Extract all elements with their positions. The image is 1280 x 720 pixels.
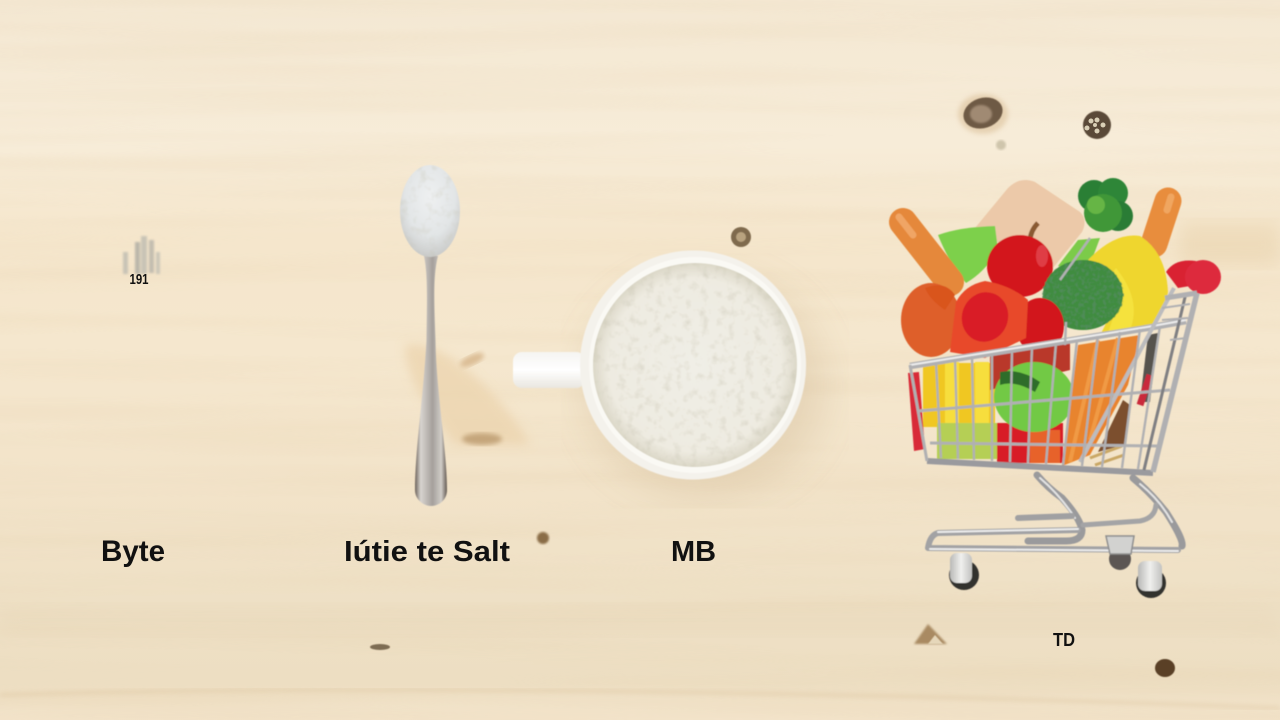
red apple xyxy=(987,223,1053,297)
bread xyxy=(975,180,1085,268)
orange tomato xyxy=(901,283,961,357)
spoon bowl with salt xyxy=(400,165,460,257)
spoon of salt xyxy=(400,165,460,506)
left carrot xyxy=(903,222,950,282)
yellow banana xyxy=(1088,236,1168,335)
label: cart caption: TD xyxy=(1053,630,1075,650)
red handle cap xyxy=(1166,260,1221,294)
front right wheel xyxy=(1136,561,1166,598)
basket contents xyxy=(923,333,1158,466)
red pepper xyxy=(950,281,1028,358)
label: mug caption: MB xyxy=(671,536,716,568)
centre broccoli xyxy=(1040,258,1126,332)
mug of powder xyxy=(513,250,825,495)
label: byte grains number: 191 xyxy=(130,271,148,288)
top broccoli xyxy=(1078,178,1133,232)
back wheel xyxy=(1106,536,1134,570)
mug body xyxy=(580,250,806,480)
small green leaf xyxy=(1058,238,1100,270)
mug handle xyxy=(513,352,585,388)
green pepper xyxy=(938,226,998,283)
red tag xyxy=(908,372,925,451)
right red pepper xyxy=(1016,298,1064,354)
label: byte caption: Byte xyxy=(101,535,165,568)
right carrot xyxy=(1154,201,1168,244)
shopping cart xyxy=(899,178,1221,598)
spoon handle xyxy=(415,256,447,506)
food pile xyxy=(899,178,1171,358)
wood knots xyxy=(305,93,1175,677)
label: spoon caption: Iútie te Salt xyxy=(344,536,510,568)
powder fill xyxy=(590,260,800,470)
front left wheel xyxy=(949,553,979,590)
cart base and legs xyxy=(928,475,1182,551)
icon: small byte grains xyxy=(123,236,160,274)
wire basket xyxy=(910,238,1197,473)
